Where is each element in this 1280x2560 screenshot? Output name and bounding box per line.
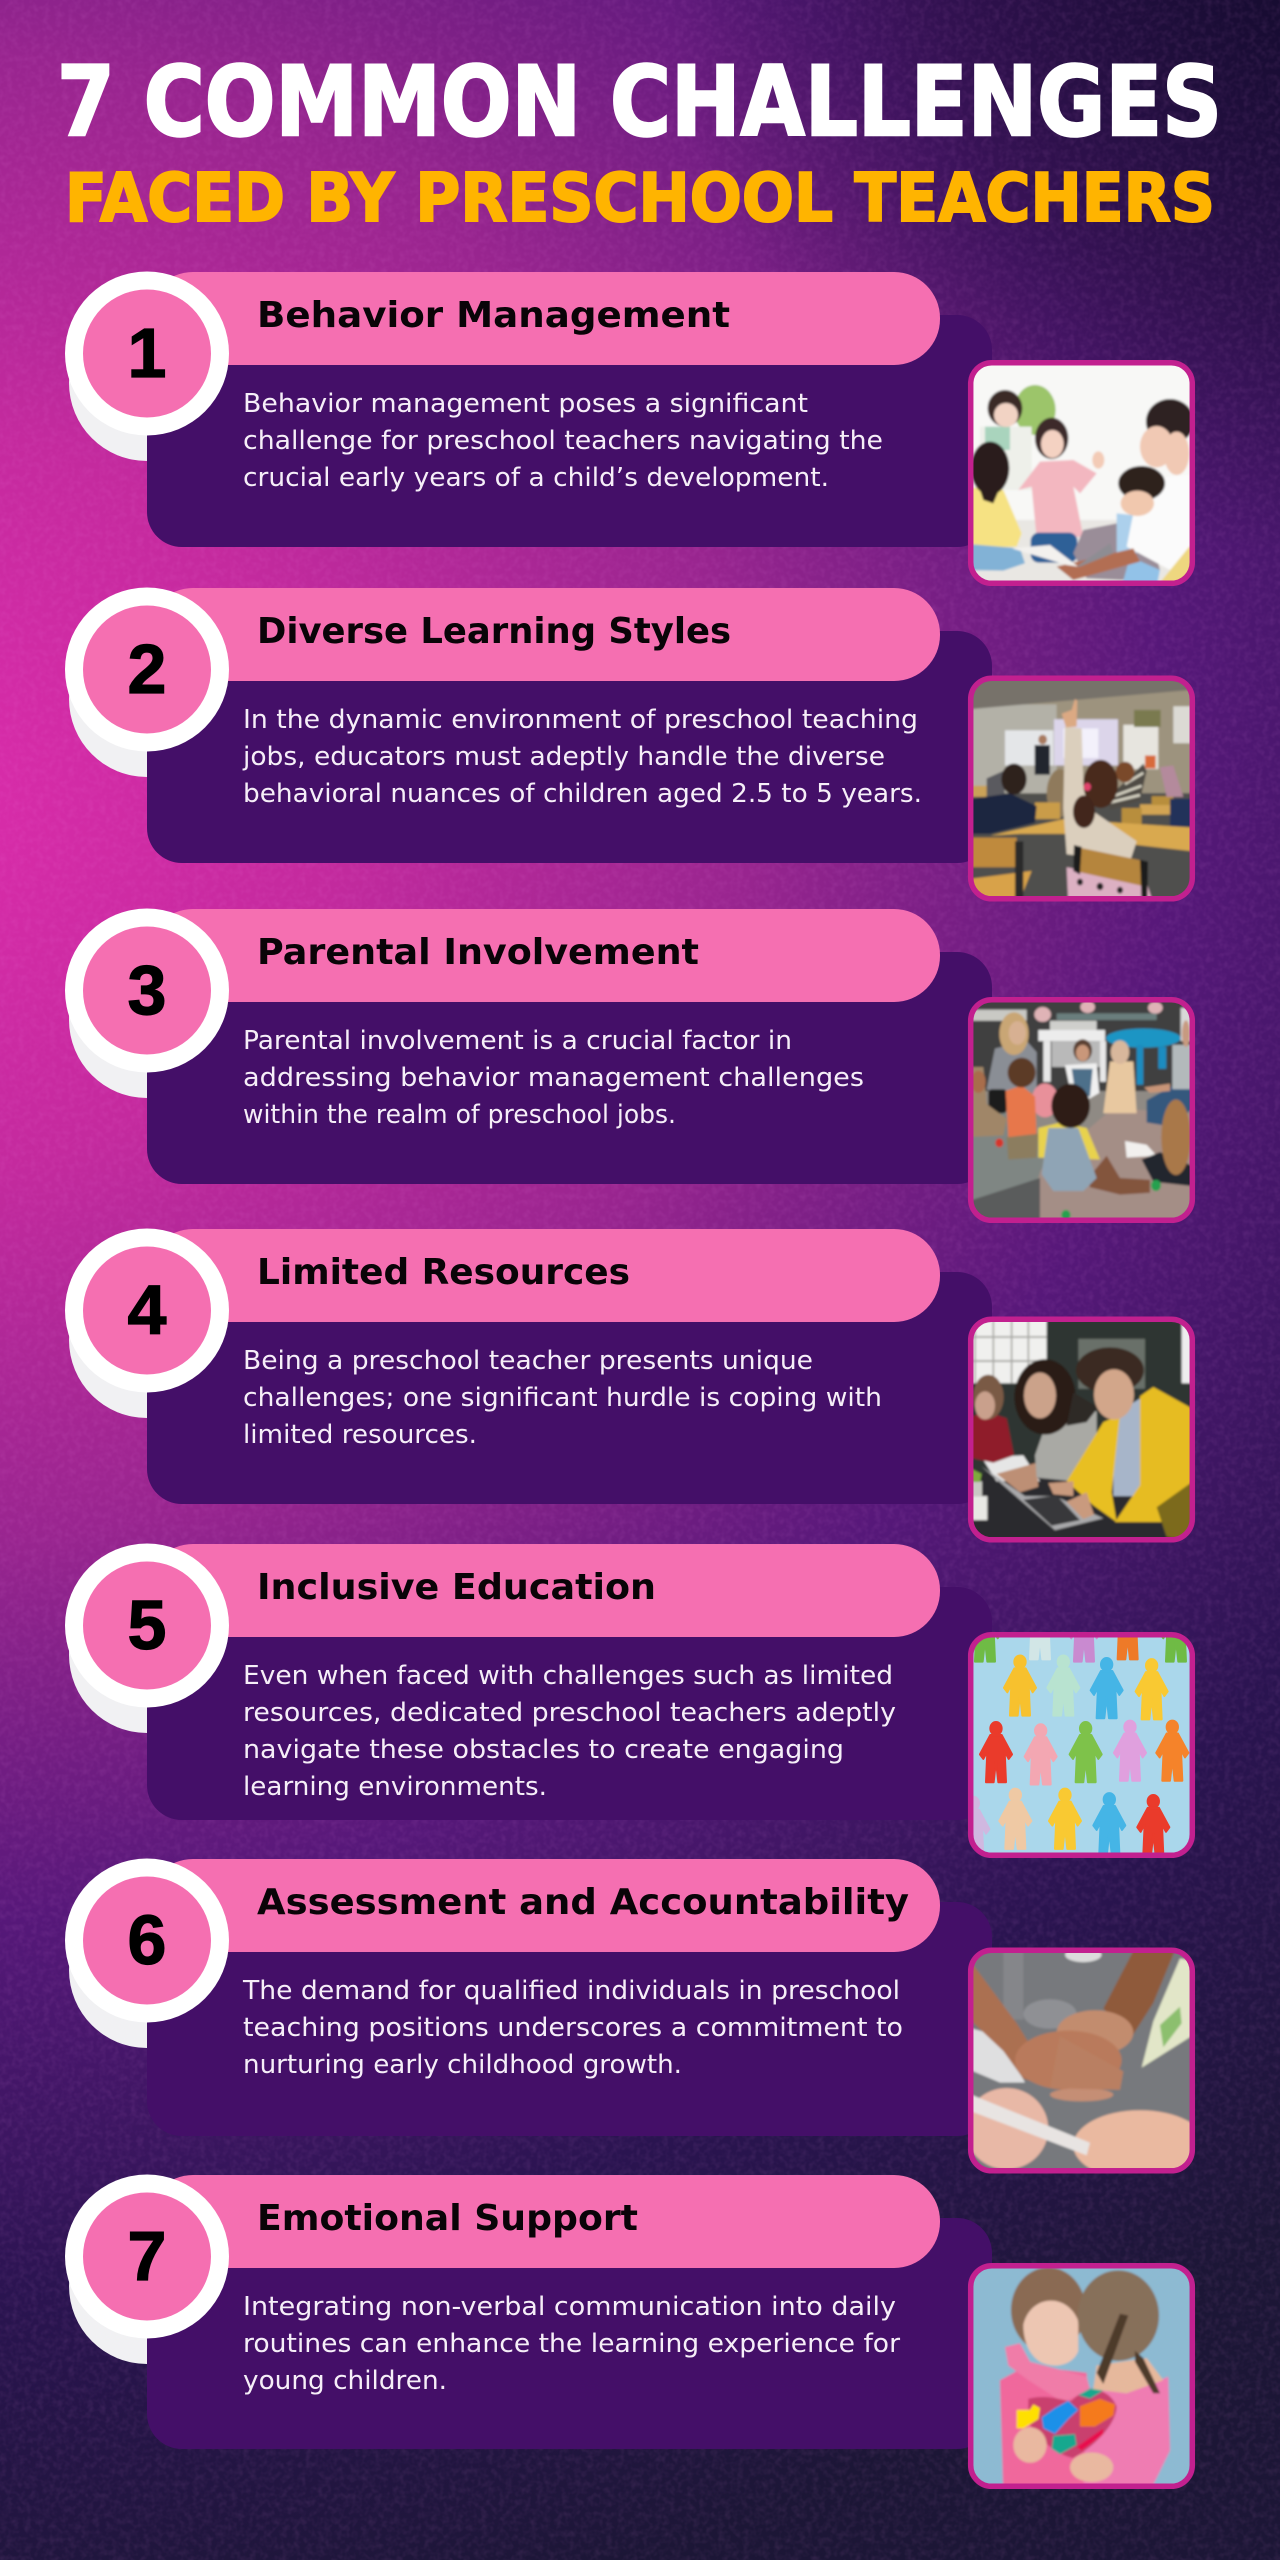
photo 2: classroom with raised hand: [968, 676, 1196, 902]
photo 6: clasped hands: [968, 1948, 1196, 2174]
description 6: [242, 1976, 903, 2080]
description 3: Parental involvement is a crucial factor in: [243, 1026, 792, 1056]
description 3: [243, 1026, 864, 1130]
description 2: [242, 705, 922, 809]
number 2: 2: [128, 630, 166, 708]
panel: challenge 4: [65, 1228, 992, 1504]
number 4: 4: [128, 1271, 167, 1349]
description 4: Being a preschool teacher presents unique: [243, 1346, 813, 1376]
description 3: within the realm of preschool jobs.: [243, 1100, 676, 1130]
photo 1: teachers and children reading: [968, 360, 1196, 586]
heading 4: Limited Resources: [257, 1252, 630, 1293]
description 5: learning environments.: [243, 1772, 547, 1802]
number 6: 6: [128, 1901, 166, 1979]
description 4: limited resources.: [243, 1420, 477, 1450]
heading 7: Emotional Support: [257, 2198, 638, 2239]
description 2: jobs, educators must adeptly handle the diverse: [242, 742, 885, 772]
description 6: The demand for qualified individuals in preschool: [242, 1976, 900, 2006]
number 5: 5: [128, 1586, 166, 1664]
description 1: crucial early years of a child’s development.: [243, 463, 829, 493]
heading 1: Behavior Management: [257, 295, 730, 336]
panel: challenge 1: [65, 272, 992, 547]
panel: challenge 2: [65, 588, 992, 863]
heading 3: Parental Involvement: [257, 932, 699, 973]
photo 3: circle time on the rug: [968, 997, 1196, 1223]
heading 5: Inclusive Education: [257, 1567, 656, 1608]
description 5: [243, 1661, 896, 1802]
description 2: behavioral nuances of children aged 2.5 to 5 years.: [243, 779, 922, 809]
number 7: 7: [128, 2217, 166, 2295]
panel: challenge 3: [65, 908, 992, 1184]
description 5: navigate these obstacles to create engaging: [243, 1735, 844, 1765]
panel: challenge 6: [65, 1858, 992, 2136]
description 7: Integrating non-verbal communication into daily: [243, 2292, 896, 2322]
description 3: addressing behavior management challenges: [243, 1063, 864, 1093]
description 1: [243, 389, 883, 493]
description 4: challenges; one significant hurdle is coping with: [243, 1383, 882, 1413]
description 7: [243, 2292, 900, 2396]
description 5: Even when faced with challenges such as limited: [243, 1661, 893, 1691]
photo 5: colourful paper people: [968, 1632, 1196, 1858]
description 5: resources, dedicated preschool teachers adeptly: [243, 1698, 896, 1728]
heading 6: Assessment and Accountability: [257, 1882, 909, 1923]
number 3: 3: [128, 951, 166, 1029]
description 1: Behavior management poses a significant: [243, 389, 808, 419]
panel: challenge 5: [65, 1544, 992, 1820]
description 7: routines can enhance the learning experience for: [243, 2329, 900, 2359]
description 6: nurturing early childhood growth.: [243, 2050, 682, 2080]
description 4: [243, 1346, 882, 1450]
description 7: young children.: [243, 2366, 447, 2396]
description 6: teaching positions underscores a commitment to: [243, 2013, 903, 2043]
description 1: challenge for preschool teachers navigating the: [243, 426, 883, 456]
description 2: In the dynamic environment of preschool teaching: [243, 705, 918, 735]
photo 4: students at a laptop: [968, 1316, 1196, 1542]
panel: challenge 7: [65, 2174, 992, 2449]
heading 2: Diverse Learning Styles: [257, 611, 731, 652]
number 1: 1: [128, 314, 166, 392]
photo 7: two girls hugging with puzzle heart: [968, 2263, 1196, 2489]
